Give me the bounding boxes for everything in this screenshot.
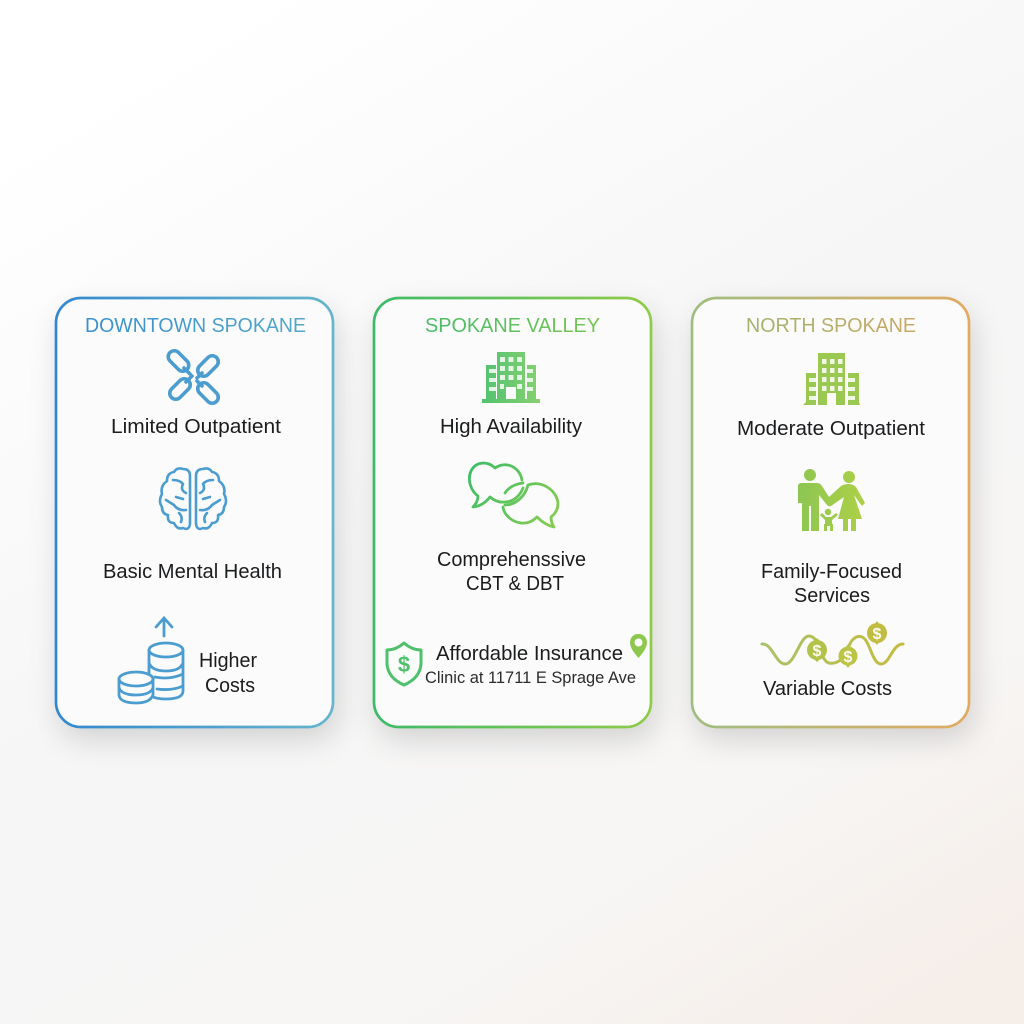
label: Limited Outpatient: Limited Outpatient [111,416,281,438]
icon: speech bubbles [469,463,558,527]
icon: map pin [630,634,647,658]
label: Comprehenssive CBT & DBT: CBT & DBT [466,573,564,595]
icon: fluctuating cost wave: $ [873,626,882,643]
panel: North Spokane [692,298,969,727]
icon: insurance shield: $ [398,652,410,677]
label: clinic address: Clinic at 11711 E Sprage Ave [425,668,636,687]
label: Higher Costs [199,650,257,697]
icon: fluctuating cost wave: $ [844,649,853,666]
icon: broken chain [166,348,221,406]
label: Comprehenssive CBT & DBT: Comprehenssive [437,549,586,571]
icon: office building [482,352,540,403]
icon: family [798,469,865,531]
icon: rising coin stacks [119,618,183,703]
icon: insurance shield [387,643,421,685]
heading: North Spokane: NORTH SPOKANE [746,314,916,337]
label: Family-Focused Services [761,561,902,607]
label: High Availability: High Availability [440,416,582,438]
heading: Downtown Spokane: DOWNTOWN SPOKANE [85,314,306,337]
label: Variable Costs: Variable Costs [763,678,892,700]
heading: Spokane Valley: SPOKANE VALLEY [425,314,600,337]
icon: fluctuating cost wave: $ [813,643,822,660]
label: Comprehenssive CBT & DBT [437,549,586,595]
panel: Spokane Valley [374,298,651,727]
label: Basic Mental Health: Basic Mental Health [103,561,282,583]
label: Family-Focused Services: Services [794,585,870,607]
icon: fluctuating cost wave [762,621,903,668]
label: Affordable Insurance: Affordable Insurance [436,643,623,665]
icon: brain [160,468,226,529]
icon: office building [803,353,860,405]
label: Higher Costs: Higher [199,650,257,672]
label: Moderate Outpatient: Moderate Outpatient [737,418,925,440]
panel: Downtown Spokane [56,298,333,727]
label: Higher Costs: Costs [205,675,255,697]
label: Family-Focused Services: Family-Focused [761,561,902,583]
